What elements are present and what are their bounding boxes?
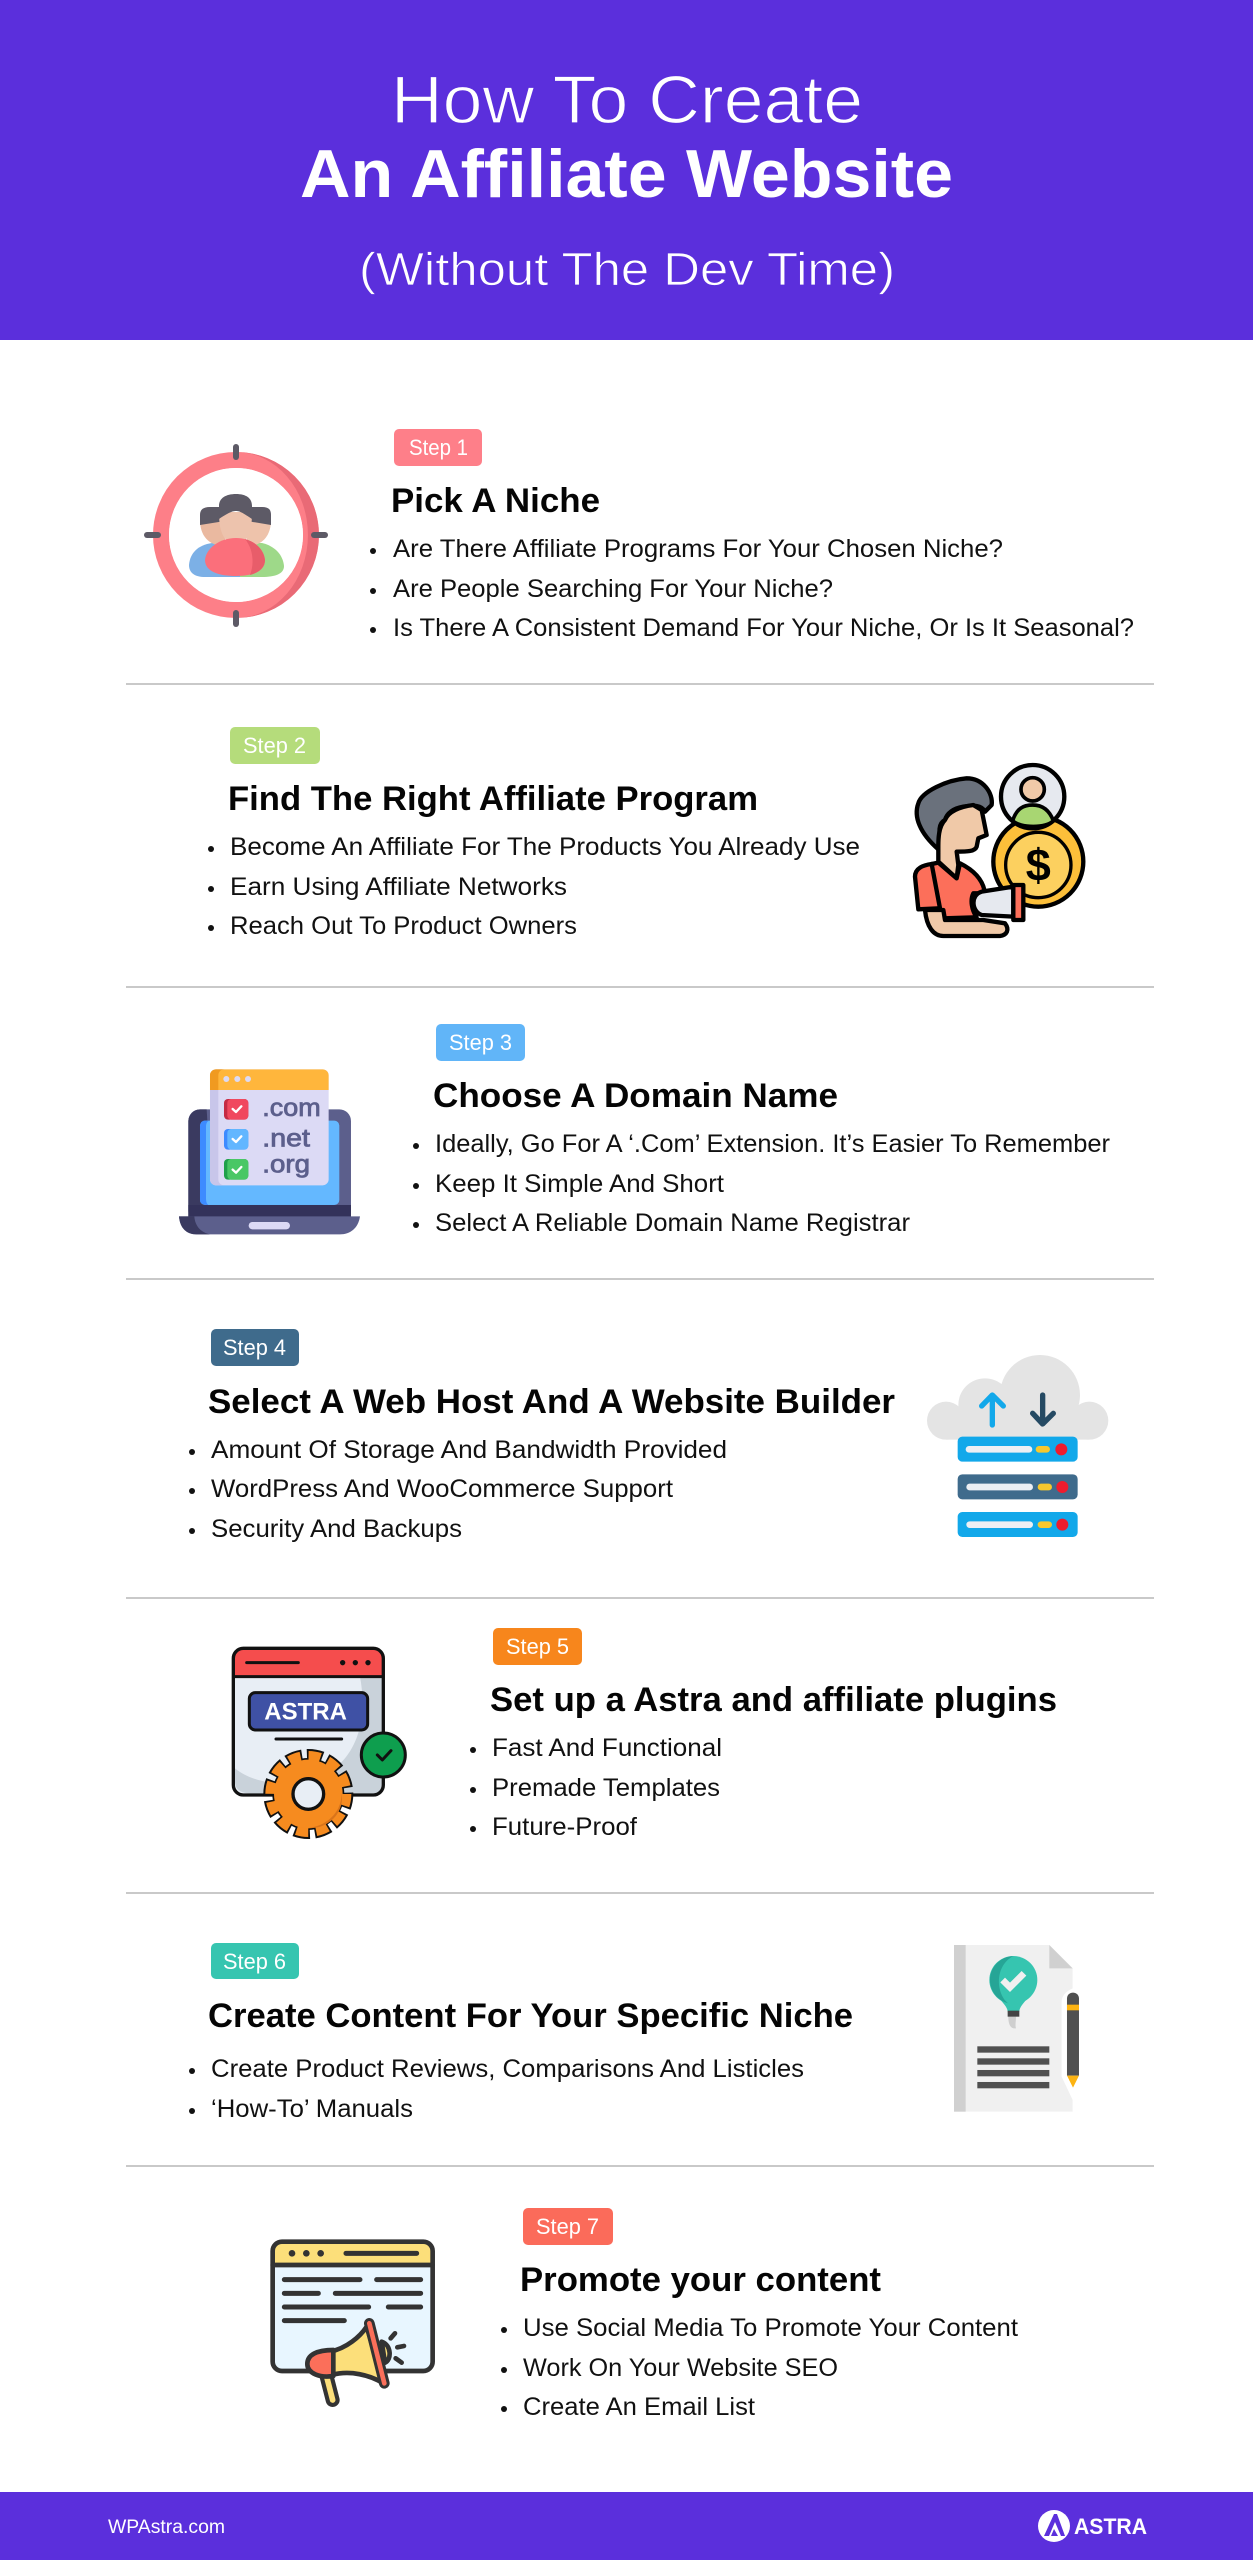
badge: step 2: Step 2: [243, 733, 306, 758]
panel: step 1: [144, 429, 1134, 642]
panel: step 3: [179, 1024, 1110, 1237]
icon: domain list on laptop: .org: [262, 1150, 310, 1178]
title line 1: How To Create: [391, 62, 863, 138]
icon: Astra settings window: ASTRA: [264, 1698, 347, 1725]
bullet list: step 3: Select A Reliable Domain Name Registrar: [435, 1209, 910, 1237]
badge: step 1: Step 1: [409, 435, 468, 460]
bullet list: step 2: [208, 833, 860, 940]
badge: step 2: [230, 727, 320, 764]
bullet list: step 5: Future-Proof: [492, 1813, 637, 1841]
bullet list: step 1: Is There A Consistent Demand For Your Niche, Or Is It Seasonal?: [393, 614, 1134, 642]
icon: affiliate marketer with coin: $: [1026, 840, 1051, 891]
bullet list: step 5: [470, 1734, 722, 1841]
logo: Astra: ASTRA: [1074, 2514, 1147, 2539]
bullet list: step 4: Amount Of Storage And Bandwidth Provided: [211, 1436, 727, 1464]
bullet list: step 6: Create Product Reviews, Comparisons And Listicles: [211, 2055, 804, 2083]
bullet list: step 1: Are There Affiliate Programs For Your Chosen Niche?: [393, 535, 1003, 563]
badge: step 3: [436, 1024, 525, 1061]
bullet list: step 7: Use Social Media To Promote Your Content: [523, 2314, 1018, 2342]
bullet list: step 3: [413, 1130, 1110, 1237]
badge: step 4: [211, 1329, 299, 1366]
panel: step 2: [208, 727, 1083, 940]
panel: step 7: [273, 2208, 1018, 2421]
icon: target with people: [144, 444, 328, 627]
badge: step 4: Step 4: [223, 1335, 286, 1360]
badge: step 5: Step 5: [506, 1634, 569, 1659]
panel: step 6: [189, 1943, 1079, 2123]
bullet list: step 2: Become An Affiliate For The Products You Already Use: [230, 833, 860, 861]
badge: step 5: [493, 1628, 582, 1665]
icon: domain list on laptop: .com: [262, 1094, 321, 1122]
bullet list: step 7: [501, 2314, 1018, 2421]
bullet list: step 1: Are People Searching For Your Niche?: [393, 575, 833, 603]
heading: step 7: Promote your content: [520, 2261, 881, 2299]
footer band: [0, 2492, 1253, 2560]
bullet list: step 6: [189, 2055, 804, 2123]
icon: document with pencil: [954, 1945, 1079, 2112]
footer site url: WPAstra.com: [108, 2517, 225, 2538]
badge: step 7: [523, 2208, 613, 2245]
bullet list: step 7: Work On Your Website SEO: [523, 2354, 838, 2382]
icon: browser with megaphone: [273, 2242, 433, 2400]
icon: domain list on laptop: .net: [262, 1125, 310, 1153]
heading: step 6: Create Content For Your Specific Niche: [208, 1997, 853, 2035]
heading: step 3: Choose A Domain Name: [433, 1077, 838, 1115]
logo: Astra: [1038, 2510, 1147, 2542]
bullet list: step 7: Create An Email List: [523, 2393, 755, 2421]
badge: step 1: [394, 429, 482, 466]
bullet list: step 3: Ideally, Go For A ‘.Com’ Extension. It’s Easier To Remember: [435, 1130, 1110, 1158]
badge: step 6: [211, 1943, 299, 1979]
bullet list: step 5: Premade Templates: [492, 1774, 720, 1802]
badge: step 7: Step 7: [536, 2214, 599, 2239]
badge: step 6: Step 6: [223, 1949, 286, 1974]
heading: step 2: Find The Right Affiliate Program: [228, 780, 758, 818]
panel: step 5: [233, 1628, 1057, 1841]
bullet list: step 4: WordPress And WooCommerce Support: [211, 1475, 673, 1503]
icon: domain list on laptop: [179, 1069, 360, 1234]
bullet list: step 1: [370, 535, 1134, 642]
badge: step 3: Step 3: [449, 1030, 512, 1055]
heading: step 4: Select A Web Host And A Website Builder: [208, 1383, 895, 1421]
header band: [0, 0, 1253, 340]
icon: cloud hosting servers: [927, 1355, 1108, 1537]
panel: step 4: [189, 1329, 1108, 1543]
heading: step 1: Pick A Niche: [391, 482, 600, 520]
icon: affiliate marketer with coin: [915, 765, 1083, 936]
bullet list: step 4: [189, 1436, 727, 1543]
bullet list: step 2: Earn Using Affiliate Networks: [230, 873, 567, 901]
bullet list: step 2: Reach Out To Product Owners: [230, 912, 577, 940]
bullet list: step 6: ‘How-To’ Manuals: [211, 2095, 413, 2123]
icon: Astra settings window: [233, 1648, 405, 1832]
bullet list: step 3: Keep It Simple And Short: [435, 1170, 724, 1198]
subtitle: (Without The Dev Time): [359, 243, 895, 295]
title line 2: An Affiliate Website: [300, 136, 953, 212]
bullet list: step 4: Security And Backups: [211, 1515, 462, 1543]
bullet list: step 5: Fast And Functional: [492, 1734, 722, 1762]
heading: step 5: Set up a Astra and affiliate plugins: [490, 1681, 1057, 1719]
